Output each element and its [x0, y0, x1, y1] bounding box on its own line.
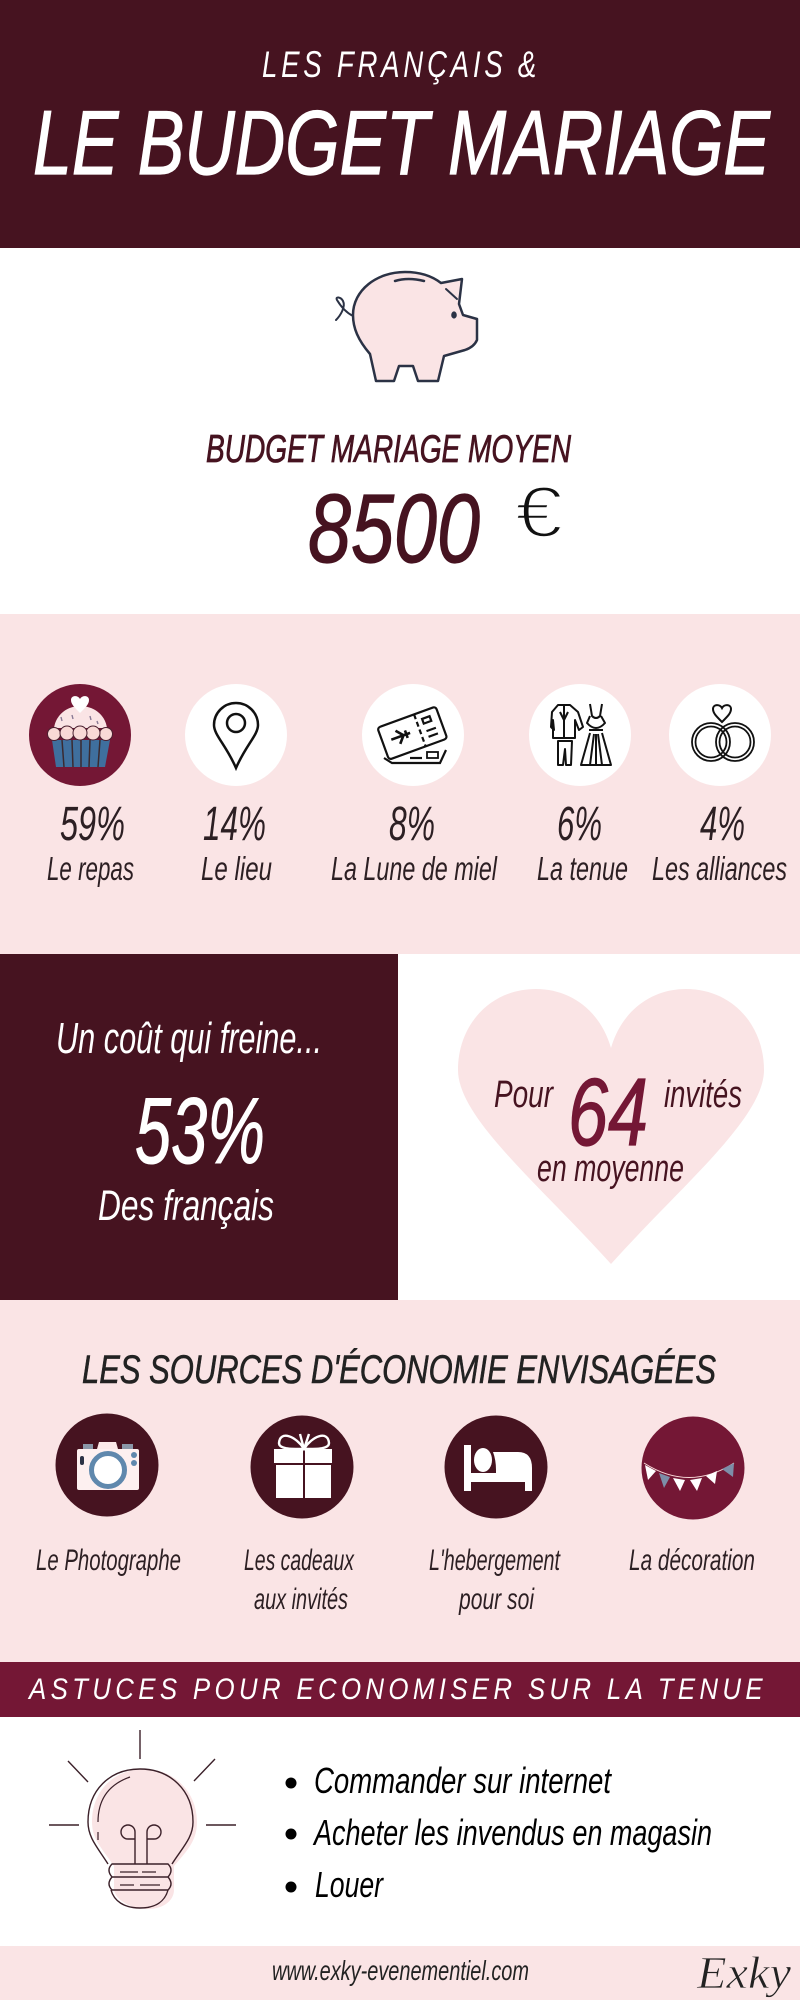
icon: bed — [444, 1416, 548, 1518]
label: les cadeaux aux invites — [244, 1544, 355, 1616]
guests text: en moyenne — [537, 1148, 684, 1190]
guests text — [494, 1059, 742, 1190]
panel: tips — [0, 1717, 800, 1946]
panel: budget breakdown — [0, 614, 800, 954]
panel: average budget — [0, 248, 800, 614]
subtitle: LES FRANÇAIS & — [262, 44, 540, 85]
stat: la lune de miel — [331, 798, 498, 887]
label: le photographe: Le Photographe — [36, 1544, 181, 1577]
stat: le lieu: Le lieu — [201, 850, 272, 887]
label: hebergement pour soi — [429, 1544, 561, 1616]
budget amount: 8500 — [308, 474, 480, 583]
panel: header — [0, 0, 800, 248]
icon: location pin — [185, 684, 287, 786]
panel: tips banner — [0, 1662, 800, 1717]
guests text: 64 — [568, 1059, 648, 1166]
icon: wedding outfits — [529, 684, 631, 786]
stat: la tenue — [537, 798, 628, 887]
stat: la tenue: 6% — [557, 798, 602, 851]
icon: light bulb — [49, 1730, 236, 1909]
stat: les alliances — [652, 798, 787, 887]
guests text: Pour — [494, 1074, 554, 1116]
cost caption: Des français — [98, 1182, 274, 1230]
icon: cupcake — [29, 684, 131, 786]
stat: le lieu — [201, 798, 272, 887]
stat: le repas: Le repas — [47, 850, 134, 887]
guests text: invités — [664, 1074, 742, 1116]
tips list: Louer — [315, 1864, 384, 1905]
stat: les alliances: 4% — [700, 798, 745, 851]
label: les cadeaux aux invites: aux invités — [254, 1583, 348, 1616]
label: hebergement pour soi: L'hebergement — [429, 1544, 561, 1577]
icon: bunting — [642, 1416, 744, 1520]
icon: wedding rings — [669, 684, 771, 786]
tips list: Commander sur internet — [314, 1760, 613, 1801]
stat: la tenue: La tenue — [537, 850, 628, 887]
label: les cadeaux aux invites: Les cadeaux — [244, 1544, 355, 1577]
panel: guests heart — [398, 954, 799, 1300]
budget heading: BUDGET MARIAGE MOYEN — [206, 428, 572, 471]
cost percentage: 53% — [135, 1078, 265, 1183]
stat: le lieu: 14% — [203, 798, 266, 851]
heart shape — [458, 989, 764, 1264]
tips list — [286, 1760, 712, 1905]
stat: la lune de miel: La Lune de miel — [331, 850, 498, 887]
icon: camera — [56, 1414, 158, 1516]
stat: la lune de miel: 8% — [389, 798, 435, 851]
panel: savings sources — [0, 1300, 800, 1662]
panel: cost brake — [0, 954, 398, 1300]
icon: plane tickets — [362, 684, 464, 786]
euro sign: € — [515, 473, 563, 553]
label: hebergement pour soi: pour soi — [458, 1583, 535, 1616]
logo: Exky — [696, 1947, 792, 1998]
website: www.exky-evenementiel.com — [272, 1955, 529, 1986]
cost heading: Un coût qui freine... — [56, 1014, 322, 1063]
stat: le repas: 59% — [60, 798, 125, 851]
icon: piggy bank — [336, 272, 477, 381]
panel: footer — [0, 1946, 800, 2000]
stat: le repas — [47, 798, 134, 887]
icon: gift — [250, 1416, 354, 1518]
